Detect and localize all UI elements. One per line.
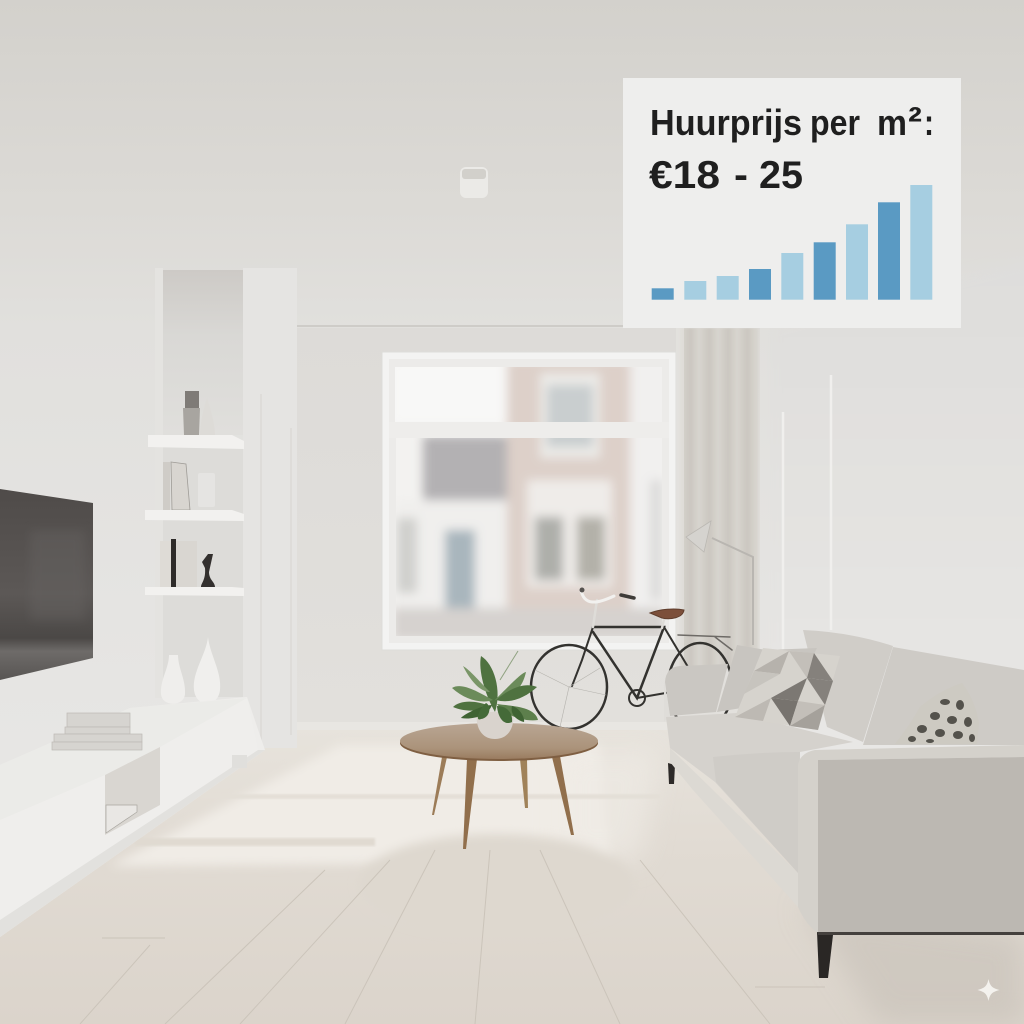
curtain (676, 328, 758, 668)
sparkle watermark (978, 979, 1000, 1001)
geometric pillow (735, 648, 840, 730)
price range: 25 (759, 154, 803, 197)
shelf vases top (183, 391, 215, 435)
patterned pillow (895, 683, 979, 744)
ceiling fixture (460, 167, 488, 198)
floor lamp (686, 521, 753, 645)
television (0, 489, 93, 680)
white floor vases (161, 637, 220, 704)
coffee table (400, 723, 598, 849)
price range: - (734, 154, 748, 197)
heading: rent per square metre: m (877, 102, 907, 143)
shelf 2 (145, 510, 244, 521)
seat (666, 713, 853, 873)
back cushion right (863, 647, 1024, 745)
sofa base (670, 748, 798, 907)
sofa (664, 630, 1024, 978)
front leg (817, 932, 833, 978)
potted plant (452, 651, 538, 739)
books middle shelf (163, 462, 215, 510)
bicycle (531, 588, 732, 731)
heading: rent per square metre: per (810, 102, 860, 143)
price panel (623, 78, 961, 328)
shelf 1 (148, 435, 244, 449)
stacked books on console (52, 713, 142, 750)
TV console (0, 697, 265, 937)
heading: rent per square metre: Huurprijs (650, 102, 802, 143)
price range (649, 154, 803, 197)
arm rest (665, 664, 728, 716)
window with blurred street view (382, 352, 676, 650)
left built-in niche with shelves (145, 268, 297, 748)
back left leg (668, 763, 675, 784)
bar chart (652, 185, 932, 300)
heading: rent per square metre: : (924, 102, 934, 143)
back cushion left (803, 630, 893, 742)
heading: rent per square metre: ² (908, 100, 922, 144)
floor with planks and sunlight (0, 728, 1024, 1024)
books lower shelf and figurine (160, 539, 215, 587)
front arm (798, 745, 1024, 933)
console cubby (105, 747, 160, 835)
right wall door panels (783, 375, 831, 650)
heading: rent per square metre (650, 100, 934, 144)
price range: €18 (649, 154, 720, 197)
plain pillow (717, 645, 817, 712)
inner door edge (261, 394, 291, 745)
shelf 3 (145, 587, 244, 596)
